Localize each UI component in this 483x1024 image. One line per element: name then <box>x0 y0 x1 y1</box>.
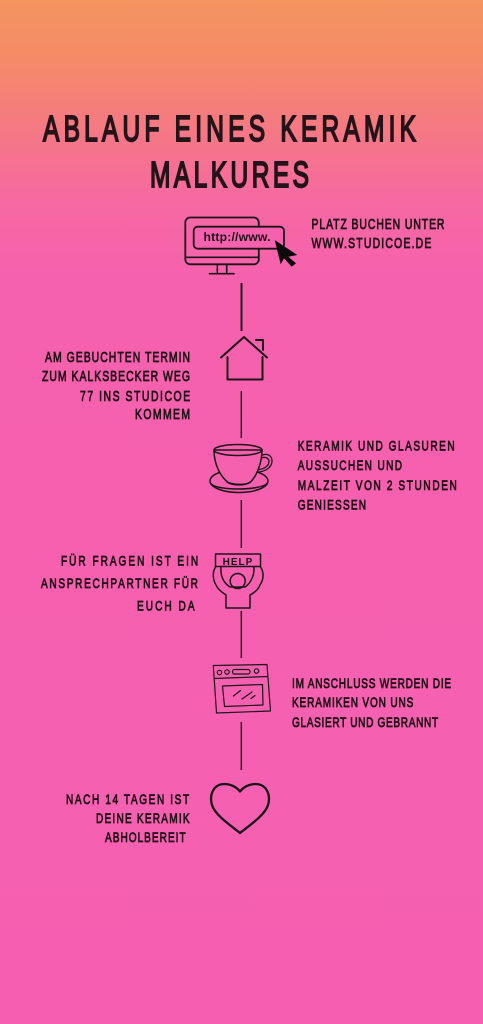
step 5 text: glazing and firing: GLASIERT UND GEBRANNT <box>292 714 439 730</box>
connector line 5 <box>240 722 242 770</box>
step 3 text: choose ceramics and glazes: MALZEIT VON 2 STUNDEN <box>298 477 457 493</box>
connector line 2 <box>240 391 242 438</box>
step 2 text: come to the studio: 77 INS STUDICOE <box>80 388 190 404</box>
icon: computer with url: http://www. <box>204 230 270 244</box>
step 5 text: glazing and firing <box>292 675 451 730</box>
step 5 text: glazing and firing: IM ANSCHLUSS WERDEN DIE <box>292 675 451 691</box>
title: ABLAUF EINES KERAMIK <box>43 108 416 149</box>
step 5 text: glazing and firing: KERAMIKEN VON UNS <box>292 694 413 710</box>
connector line 3 <box>240 500 242 548</box>
step 3 text: choose ceramics and glazes: AUSSUCHEN UND <box>298 457 402 473</box>
step 4 text: contact person: FÜR FRAGEN IST EIN <box>61 553 198 569</box>
step 2 text: come to the studio: KOMMEM <box>135 406 190 422</box>
icon: heart <box>211 784 269 833</box>
step 4 text: contact person: ANSPRECHPARTNER FÜR <box>41 575 198 591</box>
title: MALKURES <box>150 154 309 195</box>
step 2 text: come to the studio: AM GEBUCHTEN TERMIN <box>45 349 190 365</box>
step 6 text: ready for pickup <box>66 791 190 845</box>
step 6 text: ready for pickup: ABHOLBEREIT <box>105 829 186 845</box>
step 6 text: ready for pickup: DEINE KERAMIK <box>96 810 190 826</box>
title <box>43 108 416 195</box>
icon: computer with url <box>185 218 297 274</box>
connector line 1 <box>240 283 242 331</box>
connector line 4 <box>240 611 242 658</box>
icon: kiln oven <box>213 664 270 713</box>
step 1 text: book a place: WWW.STUDICOE.DE <box>312 235 431 251</box>
step 3 text: choose ceramics and glazes: GENIESSEN <box>298 497 366 513</box>
step 1 text: book a place <box>312 216 444 251</box>
step 2 text: come to the studio <box>42 349 190 422</box>
step 2 text: come to the studio: ZUM KALKSBECKER WEG <box>42 368 190 384</box>
icon: cup and saucer <box>210 444 272 492</box>
step 1 text: book a place: PLATZ BUCHEN UNTER <box>312 216 444 232</box>
step 4 text: contact person: EUCH DA <box>137 598 195 614</box>
icon: house <box>221 337 267 380</box>
icon: person holding help sign <box>213 554 263 608</box>
step 6 text: ready for pickup: NACH 14 TAGEN IST <box>66 791 190 807</box>
icon: person holding help sign: HELP <box>223 557 253 568</box>
step 4 text: contact person <box>41 553 198 614</box>
step 3 text: choose ceramics and glazes <box>298 438 457 513</box>
step 3 text: choose ceramics and glazes: KERAMIK UND GLASUREN <box>298 438 455 454</box>
